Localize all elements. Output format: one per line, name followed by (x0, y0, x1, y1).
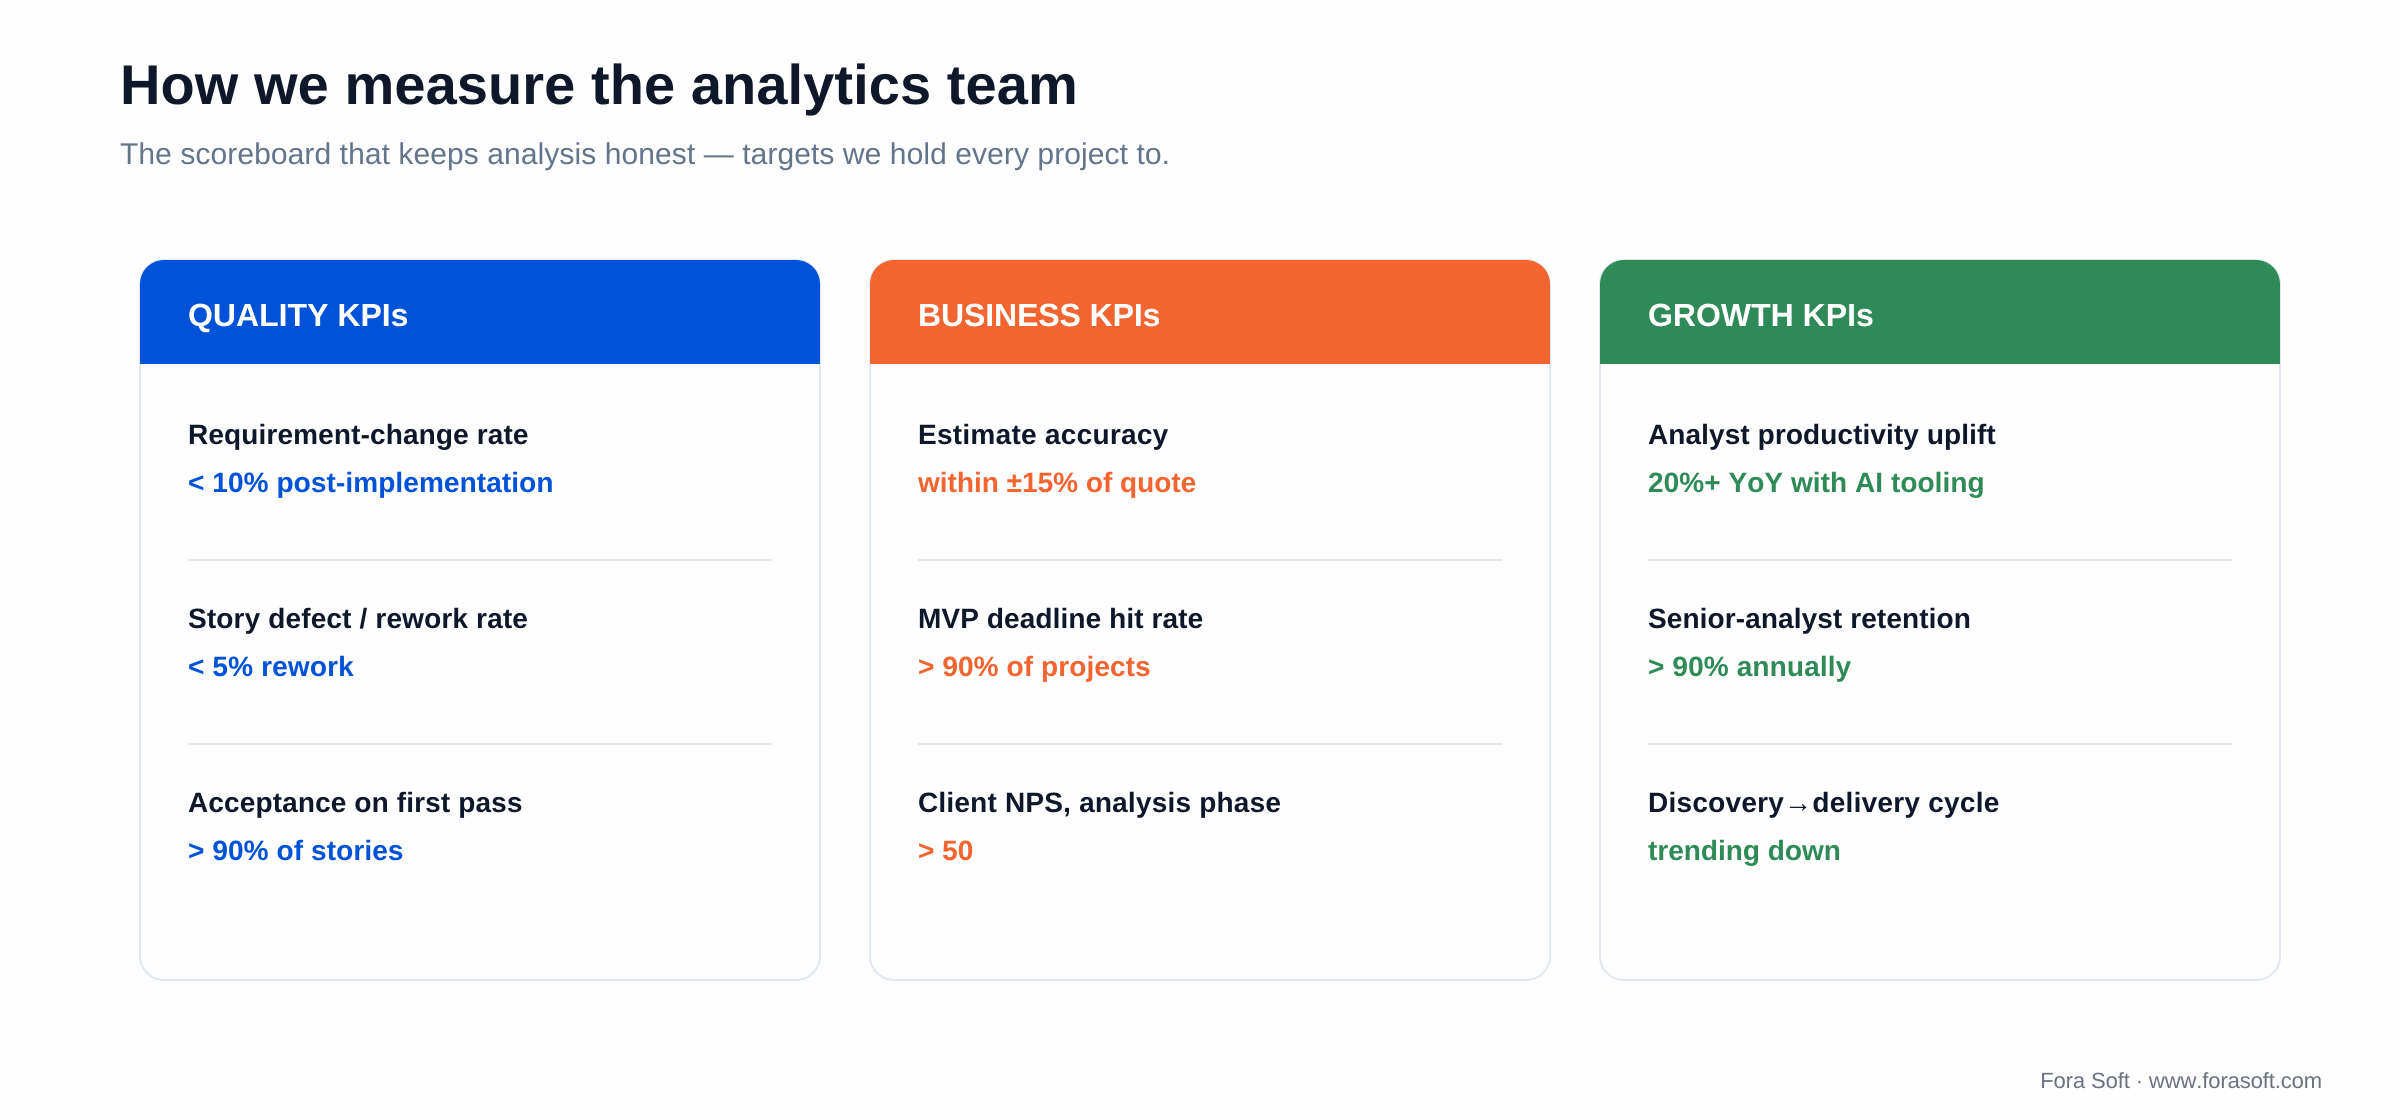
title: How we measure the analytics team (120, 53, 1078, 116)
KPI: estimate accuracy: Estimate accuracy (918, 419, 1169, 450)
KPI: analyst productivity uplift (1648, 419, 1996, 498)
KPI: MVP deadline hit rate: MVP deadline hit rate (918, 603, 1203, 634)
KPI: discovery to delivery cycle: Discovery→delivery cycle (1648, 787, 2000, 818)
KPI: client NPS (918, 787, 1281, 866)
panel: business KPIs (869, 259, 1551, 981)
KPI: story defect / rework rate (188, 603, 528, 682)
panel header: business (870, 260, 1550, 364)
KPI: estimate accuracy: within ±15% of quote (918, 467, 1196, 498)
KPI: analyst productivity uplift: Analyst productivity uplift (1648, 419, 1996, 450)
panel header: business: BUSINESS KPIs (918, 297, 1160, 333)
KPI: requirement-change rate: < 10% post-implementation (188, 467, 554, 498)
panel: growth KPIs (1599, 259, 2281, 981)
KPI: senior-analyst retention: Senior-analyst retention (1648, 603, 1971, 634)
panel: quality KPIs (139, 259, 821, 981)
KPI: story defect / rework rate: Story defect / rework rate (188, 603, 528, 634)
KPI: analyst productivity uplift: 20%+ YoY with AI tooling (1648, 467, 1985, 498)
KPI: MVP deadline hit rate: > 90% of projects (918, 651, 1151, 682)
KPI: acceptance on first pass (188, 787, 523, 866)
KPI: requirement-change rate: Requirement-change rate (188, 419, 529, 450)
subtitle: The scoreboard that keeps analysis honest — targets we hold every project to. (120, 138, 1170, 171)
panel header: quality: QUALITY KPIs (188, 297, 408, 333)
KPI: acceptance on first pass: Acceptance on first pass (188, 787, 523, 818)
KPI: senior-analyst retention: > 90% annually (1648, 651, 1851, 682)
KPI: client NPS: Client NPS, analysis phase (918, 787, 1281, 818)
footer credit: Fora Soft · www.forasoft.com (2040, 1068, 2322, 1093)
KPI: discovery to delivery cycle: trending down (1648, 835, 1841, 866)
KPI: story defect / rework rate: < 5% rework (188, 651, 354, 682)
KPI: acceptance on first pass: > 90% of stories (188, 835, 404, 866)
panel header: quality (140, 260, 820, 364)
KPI: estimate accuracy (918, 419, 1196, 498)
panel header: growth (1600, 260, 2280, 364)
KPI: requirement-change rate (188, 419, 554, 498)
KPI: senior-analyst retention (1648, 603, 1971, 682)
KPI: MVP deadline hit rate (918, 603, 1203, 682)
KPI: client NPS: > 50 (918, 835, 973, 866)
panel header: growth: GROWTH KPIs (1648, 297, 1874, 333)
KPI: discovery to delivery cycle (1648, 787, 2000, 866)
